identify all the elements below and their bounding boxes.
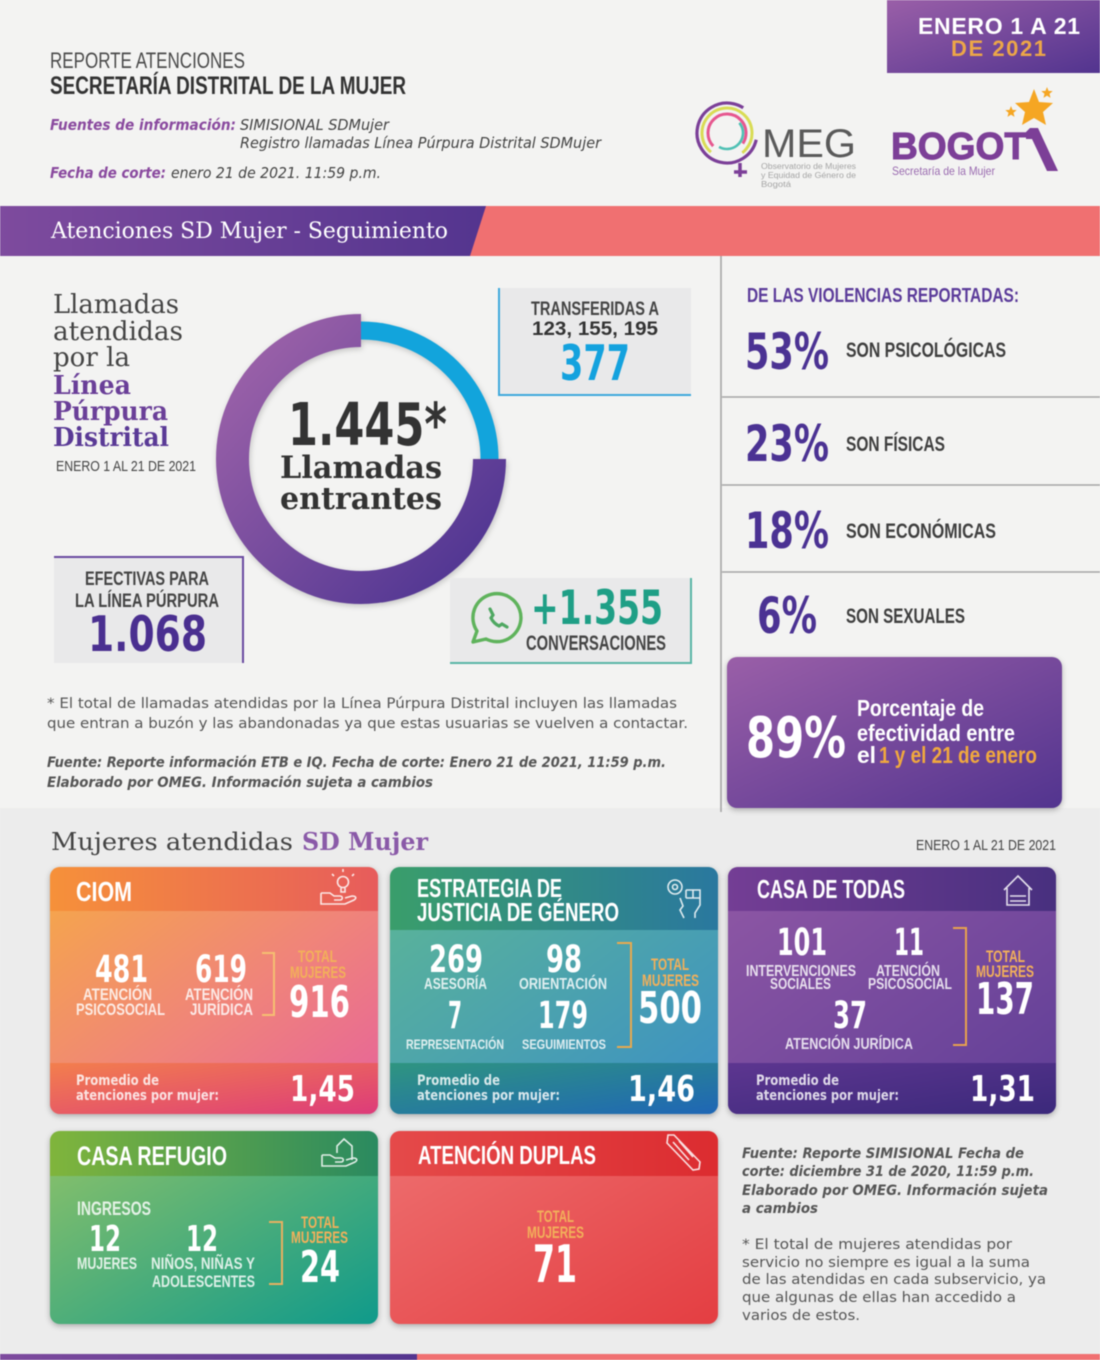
panel: Casa de Todas: TOTAL	[986, 947, 1025, 966]
stat: físicas	[745, 415, 945, 473]
panel: CIOM: ATENCIÓN	[83, 985, 152, 1004]
footnote: fuente mujeres atendidas: Elaborado por OMEG. Información sujeta	[742, 1183, 1048, 1199]
callout: transferidas: 377	[560, 335, 630, 392]
date tab: ENERO 1 A 21	[918, 13, 1080, 39]
panel: Casa Refugio: CASA REFUGIO	[77, 1141, 227, 1171]
icon: whatsapp	[473, 594, 521, 642]
footnote: fuente mujeres atendidas: a cambios	[742, 1201, 818, 1217]
panel: Casa de Todas: ATENCIÓN JURÍDICA	[785, 1034, 913, 1053]
panel: Estrategia de Justicia de Género: REPRESENTACIÓN	[406, 1035, 504, 1052]
panel: CIOM: PSICOSOCIAL	[76, 1000, 165, 1019]
panel: Estrategia de Justicia de Género: SEGUIMIENTOS	[522, 1036, 606, 1052]
stat: psicológicas: SON PSICOLÓGICAS	[846, 338, 1006, 362]
panel: CIOM: MUJERES	[290, 963, 346, 982]
panel: Atención Duplas	[390, 1131, 718, 1324]
panel: Estrategia de Justicia de Género: JUSTICIA DE GÉNERO	[417, 897, 619, 927]
footnote: fuente mujeres atendidas	[742, 1146, 1048, 1324]
heading: violencias: DE LAS VIOLENCIAS REPORTADAS:	[747, 285, 1019, 307]
footnote: fuente mujeres atendidas: servicio no siempre es igual a la suma	[742, 1255, 1030, 1271]
panel: Casa Refugio: ADOLESCENTES	[152, 1272, 255, 1291]
panel: Atención Duplas: ATENCIÓN DUPLAS	[418, 1140, 596, 1170]
callout: efectivas: LA LÍNEA PÚRPURA	[75, 590, 219, 612]
footnote: llamadas	[47, 696, 688, 791]
heading: Llamadas atendidas: por la	[53, 343, 130, 373]
heading: Llamadas atendidas: Línea	[53, 371, 131, 401]
footnote: fuente mujeres atendidas: * El total de mujeres atendidas por	[742, 1237, 1012, 1253]
callout: 89% efectividad: 1 y el 21 de enero	[879, 742, 1037, 768]
sources: Fuentes de información:	[50, 116, 236, 134]
callout: transferidas: 123, 155, 195	[532, 319, 658, 340]
footnote: fuente mujeres atendidas: varios de estos.	[742, 1308, 860, 1324]
panel: Casa de Todas: atenciones por mujer:	[756, 1088, 899, 1104]
panel: Casa Refugio: TOTAL	[301, 1213, 339, 1232]
logo: OMEG	[691, 97, 857, 189]
panel: Estrategia de Justicia de Género: MUJERES	[642, 971, 699, 990]
donut chart: 1.445 llamadas entrantes: Llamadas	[280, 450, 442, 486]
panel: CIOM: atenciones por mujer:	[76, 1088, 219, 1104]
bottom band	[0, 1354, 1100, 1360]
heading: Llamadas atendidas	[53, 290, 196, 475]
heading: Llamadas atendidas: ENERO 1 AL 21 DE 2021	[56, 458, 196, 475]
sources: SIMISIONAL SDMujer	[240, 116, 390, 134]
stat: físicas: 23%	[745, 415, 829, 473]
footnote: fuente mujeres atendidas: de las atendidas en cada subservicio, ya	[742, 1272, 1046, 1288]
panel: Casa de Todas: MUJERES	[976, 962, 1034, 981]
panel: Estrategia de Justicia de Género: ASESORÍA	[424, 974, 487, 993]
panel: Estrategia de Justicia de Género: TOTAL	[651, 955, 689, 974]
panel: CIOM: 1,45	[290, 1069, 355, 1110]
panel: Estrategia de Justicia de Género: 98	[546, 938, 582, 981]
title: SECRETARÍA DISTRITAL DE LA MUJER	[50, 71, 406, 100]
sources: enero 21 de 2021. 11:59 p.m.	[171, 164, 381, 182]
callout: conversaciones whatsapp	[450, 578, 691, 663]
callout: transferidas	[498, 288, 691, 396]
footnote: llamadas: * El total de llamadas atendidas por la Línea Púrpura Distrital incluyen las llamadas	[47, 696, 677, 712]
stat: sexuales: SON SEXUALES	[846, 605, 965, 628]
panel: CIOM: 481	[95, 948, 148, 991]
heading: Llamadas atendidas: Púrpura	[53, 397, 168, 427]
panel: Atención Duplas: 71	[533, 1235, 577, 1295]
logo: OMEG: Observatorio de Mujeres	[761, 162, 856, 171]
heading: Llamadas atendidas: Llamadas	[53, 290, 179, 320]
icon: handshake	[667, 1135, 700, 1170]
panel: CIOM: CIOM	[76, 876, 132, 907]
sources: Fecha de corte:	[50, 164, 166, 182]
panel: Casa de Todas: 37	[833, 994, 867, 1037]
stat: sexuales	[757, 587, 965, 645]
panel: Casa Refugio: 12	[89, 1219, 121, 1260]
stat: económicas	[745, 502, 996, 560]
panel: Estrategia de Justicia de Género: 7	[448, 994, 462, 1037]
panel: Casa de Todas	[728, 867, 1056, 1114]
panel: Estrategia de Justicia de Género: atenciones por mujer:	[417, 1088, 560, 1104]
panel: CIOM: TOTAL	[298, 947, 337, 966]
section band: Atenciones SD Mujer: Atenciones SD Mujer - Seguimiento	[50, 219, 448, 244]
panel: Casa Refugio: INGRESOS	[77, 1199, 151, 1220]
callout: transferidas: TRANSFERIDAS A	[531, 299, 659, 320]
donut chart: 1.445 llamadas entrantes	[232, 330, 490, 588]
panel: Casa Refugio: 24	[300, 1242, 340, 1293]
logo: Bogota: Secretaría de la Mujer	[892, 164, 995, 178]
panel: Casa de Todas: INTERVENCIONES	[746, 963, 856, 980]
footnote: llamadas: Fuente: Reporte información ETB e IQ. Fecha de corte: Enero 21 de 2021, 11:59 p.m.	[47, 755, 666, 771]
sources	[50, 116, 602, 182]
callout: efectivas: 1.068	[88, 606, 207, 663]
panel: Estrategia de Justicia de Género: ESTRATEGIA DE	[417, 873, 562, 903]
footnote: fuente mujeres atendidas: corte: diciembre 31 de 2020, 11:59 p.m.	[742, 1164, 1034, 1180]
panel: Casa Refugio: NIÑOS, NIÑAS Y	[151, 1253, 256, 1273]
heading: Mujeres atendidas: Mujeres atendidas	[51, 828, 293, 856]
section band: Atenciones SD Mujer	[0, 206, 1100, 256]
callout: conversaciones whatsapp: +1.355	[531, 581, 663, 636]
logo: OMEG: y Equidad de Género de	[761, 171, 857, 180]
icon: hand with lightbulb	[321, 869, 356, 904]
panel: Casa de Todas: SOCIALES	[770, 976, 831, 993]
logo: OMEG: MEG	[762, 122, 856, 166]
panel: violencias reportadas	[721, 256, 1100, 812]
panel: CIOM: Promedio de	[76, 1073, 159, 1089]
donut chart: 1.445 llamadas entrantes: entrantes	[280, 481, 442, 517]
stat: sexuales: 6%	[757, 587, 817, 645]
icon: hand with house	[322, 1139, 357, 1166]
panel: Casa de Todas: 101	[777, 921, 827, 964]
panel: Casa Refugio: 12	[186, 1219, 218, 1260]
panel: Atención Duplas: MUJERES	[527, 1223, 584, 1242]
stat: psicológicas	[745, 323, 1006, 381]
callout: 89% efectividad: efectividad entre	[857, 720, 1015, 746]
stat: psicológicas: 53%	[745, 323, 829, 381]
panel: Estrategia de Justicia de Género: ORIENTACIÓN	[519, 974, 607, 993]
callout: efectivas: EFECTIVAS PARA	[85, 569, 209, 590]
title: REPORTE ATENCIONES	[50, 48, 245, 73]
panel: Estrategia de Justicia de Género: 500	[638, 983, 702, 1034]
panel: Casa de Todas: PSICOSOCIAL	[868, 976, 952, 993]
logo: Bogota: BOGOT	[891, 126, 1027, 168]
heading: Llamadas atendidas: Distrital	[53, 423, 169, 453]
icon: raised fist	[668, 880, 700, 918]
footnote: fuente mujeres atendidas: Fuente: Reporte SIMISIONAL Fecha de	[742, 1146, 1024, 1162]
panel: Casa Refugio: MUJERES	[291, 1228, 348, 1247]
panel: CIOM: ATENCIÓN	[185, 985, 253, 1004]
icon: house	[1004, 876, 1032, 905]
callout: conversaciones whatsapp: CONVERSACIONES	[526, 632, 666, 655]
date tab: DE 2021	[951, 36, 1046, 61]
panel: CIOM: JURÍDICA	[190, 1000, 253, 1019]
sources: Registro llamadas Línea Púrpura Distrital SDMujer	[240, 134, 602, 152]
panel: Casa de Todas: Promedio de	[756, 1073, 839, 1089]
stat: económicas: SON ECONÓMICAS	[846, 519, 996, 543]
panel: CIOM	[50, 867, 378, 1114]
panel: Casa de Todas: ATENCIÓN	[876, 961, 940, 980]
panel: Casa Refugio	[50, 1131, 378, 1324]
panel: Atención Duplas: TOTAL	[537, 1207, 574, 1226]
panel: Casa de Todas: 1,31	[970, 1069, 1035, 1110]
heading: Llamadas atendidas: atendidas	[53, 317, 183, 347]
panel: Estrategia de Justicia de Género: 179	[538, 994, 588, 1037]
panel: Estrategia de Justicia de Género: Promedio de	[417, 1073, 500, 1089]
footnote: llamadas: Elaborado por OMEG. Información sujeta a cambios	[47, 775, 433, 791]
panel: CIOM: 619	[195, 948, 247, 991]
date tab	[887, 0, 1100, 73]
panel: Casa Refugio: MUJERES	[77, 1254, 137, 1273]
panel: Estrategia de Justicia de Género	[390, 867, 718, 1114]
lower section background	[0, 808, 1100, 1360]
panel: Casa de Todas: 11	[894, 921, 924, 964]
date label: ENERO 1 AL 21 DE 2021	[916, 837, 1056, 854]
callout: 89% efectividad: Porcentaje de	[857, 695, 984, 721]
panel: CIOM: 916	[289, 977, 350, 1028]
callout: efectivas	[54, 557, 243, 663]
callout: 89% efectividad	[727, 657, 1062, 808]
logo: Bogota	[891, 87, 1058, 178]
heading: Mujeres atendidas	[51, 827, 428, 856]
callout: 89% efectividad: el	[857, 742, 876, 768]
callout: 89% efectividad: 89%	[746, 706, 846, 771]
heading: Mujeres atendidas: SD Mujer	[302, 827, 428, 856]
stat: económicas: 18%	[745, 502, 829, 560]
panel: Casa de Todas: CASA DE TODAS	[757, 874, 905, 904]
logo: OMEG: Bogotá	[761, 180, 792, 189]
footnote: llamadas: que entran a buzón y las abandonadas ya que estas usuarias se vuelven a contactar.	[47, 716, 688, 732]
panel: Estrategia de Justicia de Género: 269	[429, 938, 483, 981]
footnote: fuente mujeres atendidas: que algunas de ellas han accedido a	[742, 1290, 1016, 1306]
panel: Casa de Todas: 137	[976, 974, 1034, 1025]
panel: Estrategia de Justicia de Género: 1,46	[628, 1069, 695, 1110]
stat: físicas: SON FÍSICAS	[846, 433, 945, 456]
title	[50, 48, 406, 100]
donut chart: 1.445 llamadas entrantes: 1.445*	[288, 390, 447, 459]
